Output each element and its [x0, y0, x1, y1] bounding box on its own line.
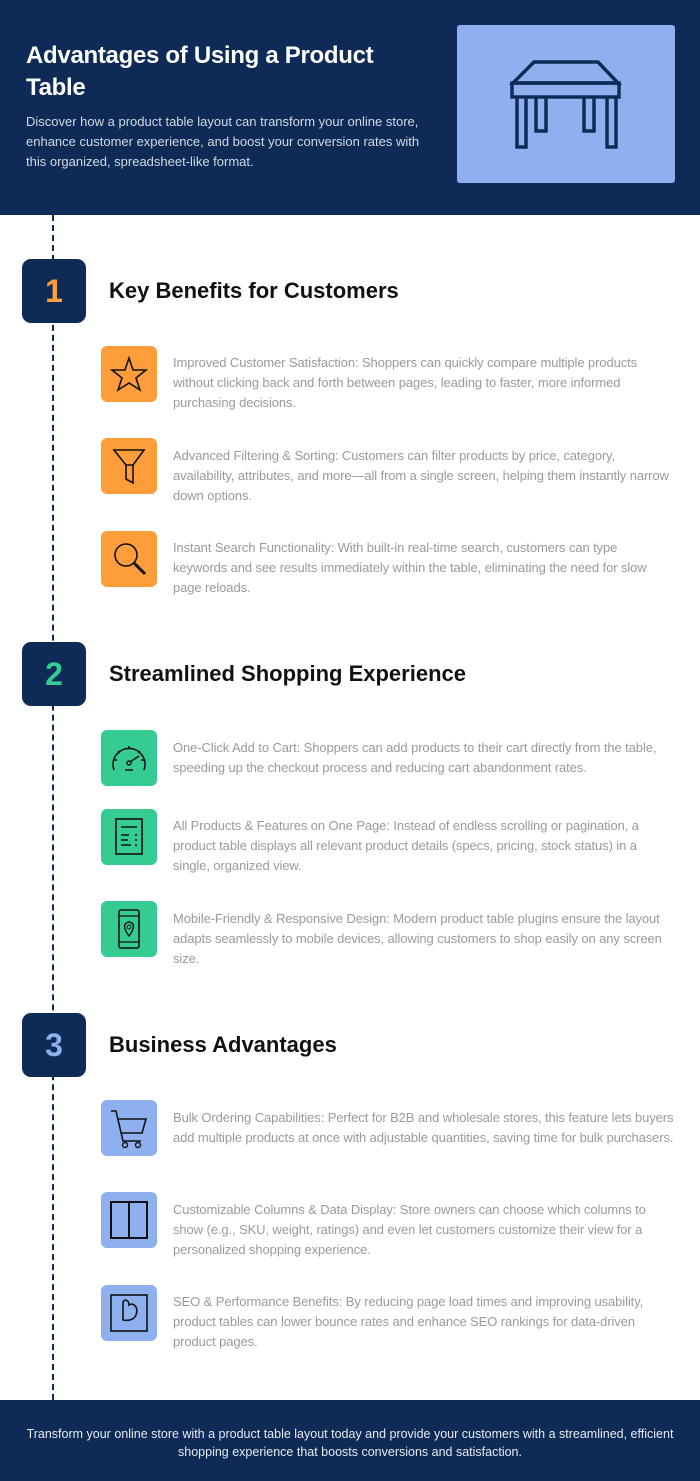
text: filtering: down options. — [173, 488, 252, 503]
icon: star — [101, 346, 157, 402]
title: Table — [26, 74, 85, 101]
text: bulk ordering: add multiple products at once with adjustable quantities, saving time for bulk purchasers. — [173, 1130, 673, 1145]
text: mobile — [173, 911, 662, 966]
text: columns: personalized shopping experience. — [173, 1242, 371, 1257]
text: filtering: Advanced Filtering & Sorting: Customers can filter products by price, category, — [173, 448, 615, 463]
icon: mobile — [101, 901, 157, 957]
section 2 number — [22, 642, 86, 706]
subtitle: Discover how a product table layout can transform your online store, — [26, 114, 418, 129]
section 3 number: 3 — [45, 1027, 63, 1063]
text: add to cart: speeding up the checkout process and reducing cart abandonment rates. — [173, 760, 587, 775]
section 1 number: 1 — [45, 273, 63, 309]
subtitle: this organized, spreadsheet-like format. — [26, 154, 254, 169]
section 3 heading: Business Advantages — [109, 1032, 337, 1057]
text: filtering: availability, attributes, and more—all from a single screen, helping them instantly narrow — [173, 468, 669, 483]
section 1 heading: Key Benefits for Customers — [109, 278, 399, 303]
text: all products: product table displays all relevant product details (specs, pricing, stock status) in a — [173, 838, 637, 853]
icon: seo — [101, 1285, 157, 1341]
text: seo: product tables can lower bounce rates and enhance SEO rankings for data-driven — [173, 1314, 635, 1329]
text: mobile: Mobile-Friendly & Responsive Design: Modern product table plugins ensure the layout — [173, 911, 660, 926]
text: add to cart: One-Click Add to Cart: Shoppers can add products to their cart directly from the table, — [173, 740, 656, 755]
text: mobile: adapts seamlessly to mobile devices, allowing customers to shop easily on any screen — [173, 931, 662, 946]
icon: funnel — [101, 438, 157, 494]
text: columns: show (e.g., SKU, weight, ratings) and even let customers customize their view for a — [173, 1222, 642, 1237]
icon: search — [101, 531, 157, 587]
text: satisfaction: Improved Customer Satisfaction: Shoppers can quickly compare multiple products — [173, 355, 637, 370]
icon: gauge — [101, 730, 157, 786]
footer: Transform your online store with a product table layout today and provide your customers with a streamlined, efficient — [27, 1427, 673, 1441]
section 2 number: 2 — [45, 656, 63, 692]
section 1 number — [22, 259, 86, 323]
icon: columns — [101, 1192, 157, 1248]
text: mobile: size. — [173, 951, 199, 966]
text: search: keywords and see results immediately within the table, eliminating the need for slow — [173, 560, 647, 575]
text: columns: Customizable Columns & Data Display: Store owners can choose which columns to — [173, 1202, 646, 1217]
text: all products — [173, 818, 639, 873]
icon: cart — [101, 1100, 157, 1156]
timeline dashed line — [52, 215, 54, 1400]
text: search — [173, 540, 647, 595]
hero icon: table — [457, 25, 675, 183]
text: columns — [173, 1202, 646, 1257]
subtitle — [26, 114, 419, 169]
header panel — [0, 0, 700, 215]
text: satisfaction: without clicking back and forth between pages, leading to faster, more informed — [173, 375, 620, 390]
footer — [0, 1400, 700, 1481]
text: bulk ordering — [173, 1110, 673, 1145]
text: seo — [173, 1294, 643, 1349]
text: seo: SEO & Performance Benefits: By reducing page load times and improving usability, — [173, 1294, 643, 1309]
subtitle: enhance customer experience, and boost your conversion rates with — [26, 134, 419, 149]
section 3 number — [22, 1013, 86, 1077]
text: all products: single, organized view. — [173, 858, 302, 873]
text: bulk ordering: Bulk Ordering Capabilities: Perfect for B2B and wholesale stores, this feature lets buyers — [173, 1110, 673, 1125]
text: all products: All Products & Features on One Page: Instead of endless scrolling or pagination, a — [173, 818, 639, 833]
text: satisfaction — [173, 355, 637, 410]
icon: document — [101, 809, 157, 865]
text: satisfaction: purchasing decisions. — [173, 395, 296, 410]
text: filtering — [173, 448, 669, 503]
text: search: Instant Search Functionality: With built-in real-time search, customers can type — [173, 540, 617, 555]
title: Advantages of Using a Product — [26, 42, 373, 69]
title — [26, 42, 374, 101]
section 2 heading: Streamlined Shopping Experience — [109, 661, 466, 686]
footer: shopping experience that boosts conversions and satisfaction. — [178, 1445, 522, 1459]
text: add to cart — [173, 740, 656, 775]
text: seo: product pages. — [173, 1334, 258, 1349]
text: search: page reloads. — [173, 580, 250, 595]
